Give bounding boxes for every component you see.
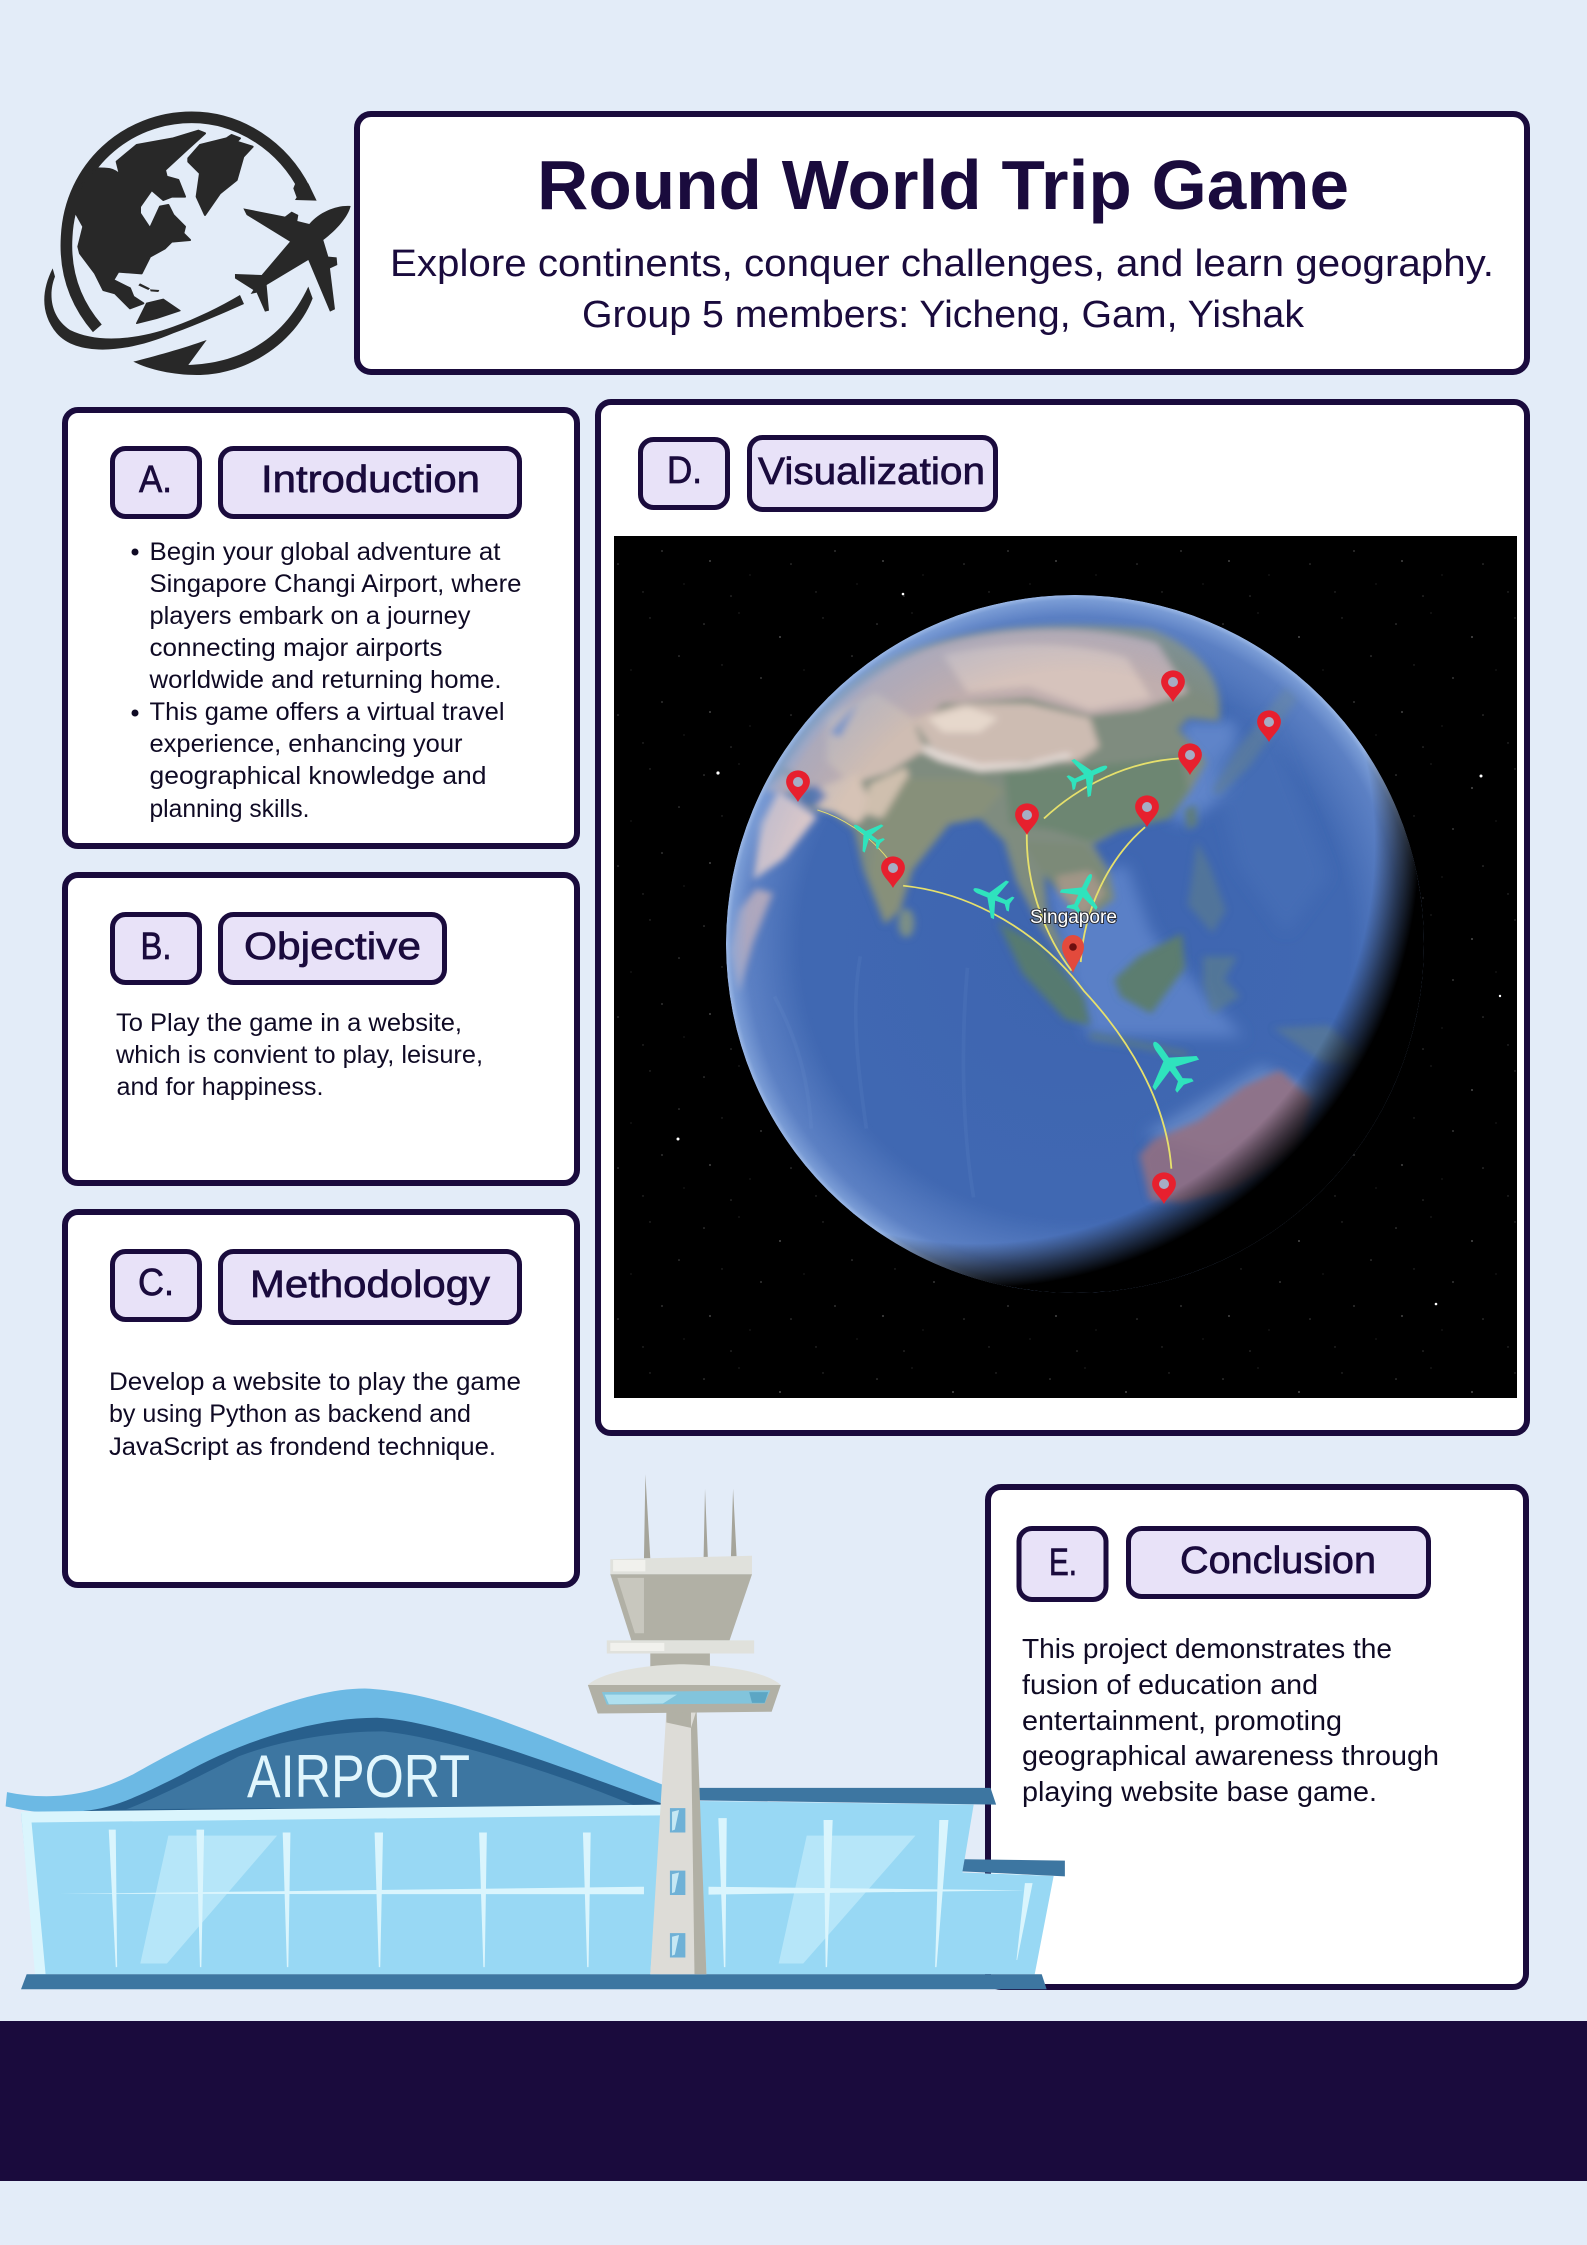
text block: objective: To Play the game in a website, bbox=[116, 1009, 462, 1037]
heading: Methodology bbox=[220, 1252, 520, 1322]
terminal roof bbox=[6, 1689, 665, 1813]
subtitle bbox=[390, 243, 1494, 336]
text block: conclusion: playing website base game. bbox=[1022, 1776, 1377, 1807]
badge: C bbox=[112, 1252, 200, 1320]
heading: Objective: Objective bbox=[244, 926, 421, 968]
text block: objective: and for happiness. bbox=[116, 1073, 324, 1101]
panel: B objective bbox=[65, 875, 577, 1183]
heading: Objective bbox=[220, 914, 444, 982]
flight routes bbox=[817, 758, 1182, 1169]
location pins bbox=[786, 670, 1281, 1204]
badge: E bbox=[1019, 1528, 1106, 1600]
title: Round World Trip Game bbox=[537, 146, 1349, 224]
heading: Visualization: Visualization bbox=[758, 451, 985, 493]
badge: D: D. bbox=[667, 450, 702, 492]
map: globe flight routes bbox=[614, 536, 1517, 1398]
heading: Conclusion bbox=[1128, 1528, 1428, 1596]
icon: globe with airplane bbox=[44, 117, 351, 375]
terminal wing roofs bbox=[21, 1788, 1065, 1989]
panel: header bbox=[357, 114, 1527, 372]
text block: methodology bbox=[109, 1368, 521, 1461]
panel: C methodology bbox=[65, 1212, 577, 1585]
text block: introduction bullets: geographical knowledge and bbox=[150, 762, 486, 790]
airplanes bbox=[845, 748, 1207, 1102]
badge: B bbox=[112, 914, 200, 982]
airport sign: AIRPORT bbox=[247, 1743, 470, 1810]
heading: Conclusion: Conclusion bbox=[1180, 1540, 1376, 1582]
text block: conclusion: This project demonstrates the bbox=[1022, 1633, 1392, 1664]
singapore marker: Singapore bbox=[1030, 907, 1117, 928]
text block: conclusion: entertainment, promoting bbox=[1022, 1705, 1342, 1736]
text block: introduction bullets: Begin your global adventure at bbox=[150, 538, 501, 566]
badge: B: B. bbox=[140, 926, 172, 968]
panel: D visualization bbox=[598, 402, 1527, 1433]
heading: Methodology: Methodology bbox=[250, 1264, 490, 1306]
control tower bbox=[588, 1474, 781, 1974]
singapore marker bbox=[1030, 907, 1117, 973]
badge: A bbox=[112, 448, 200, 516]
panel: E conclusion bbox=[988, 1487, 1526, 1987]
footer band bbox=[0, 2021, 1587, 2181]
text block: introduction bullets bbox=[132, 538, 522, 823]
badge: D bbox=[640, 440, 728, 508]
text block: introduction bullets: experience, enhancing your bbox=[150, 730, 462, 758]
badge: A: A. bbox=[139, 459, 172, 501]
text block: objective bbox=[115, 1009, 483, 1101]
badge: C: C. bbox=[138, 1262, 174, 1304]
text block: conclusion: fusion of education and bbox=[1022, 1669, 1318, 1700]
heading: Introduction bbox=[220, 448, 520, 516]
text block: introduction bullets: planning skills. bbox=[150, 795, 310, 823]
subtitle: Explore continents, conquer challenges, and learn geography. bbox=[390, 243, 1494, 285]
text block: introduction bullets: worldwide and returning home. bbox=[148, 666, 502, 694]
text block: objective: which is convient to play, leisure, bbox=[115, 1041, 483, 1069]
text block: methodology: JavaScript as frondend technique. bbox=[109, 1433, 496, 1461]
text block: conclusion bbox=[1022, 1633, 1439, 1807]
text block: introduction bullets: Singapore Changi Airport, where bbox=[150, 570, 522, 598]
text block: introduction bullets: This game offers a virtual travel bbox=[150, 698, 504, 726]
text block: introduction bullets: players embark on a journey bbox=[150, 602, 471, 630]
subtitle: Group 5 members: Yicheng, Gam, Yishak bbox=[582, 294, 1305, 336]
heading: Introduction: Introduction bbox=[261, 459, 480, 501]
text block: methodology: by using Python as backend and bbox=[109, 1400, 471, 1428]
text block: conclusion: geographical awareness through bbox=[1022, 1740, 1439, 1771]
heading: Visualization bbox=[750, 438, 996, 510]
text block: introduction bullets: connecting major airports bbox=[150, 634, 442, 662]
text block: methodology: Develop a website to play the game bbox=[109, 1368, 521, 1396]
badge: E: E. bbox=[1049, 1542, 1077, 1584]
globe bbox=[725, 594, 1425, 1294]
terminal glass bbox=[21, 1801, 1054, 1974]
illustration: airport terminal and control tower bbox=[6, 1474, 1065, 1989]
panel: A introduction bbox=[65, 410, 577, 846]
